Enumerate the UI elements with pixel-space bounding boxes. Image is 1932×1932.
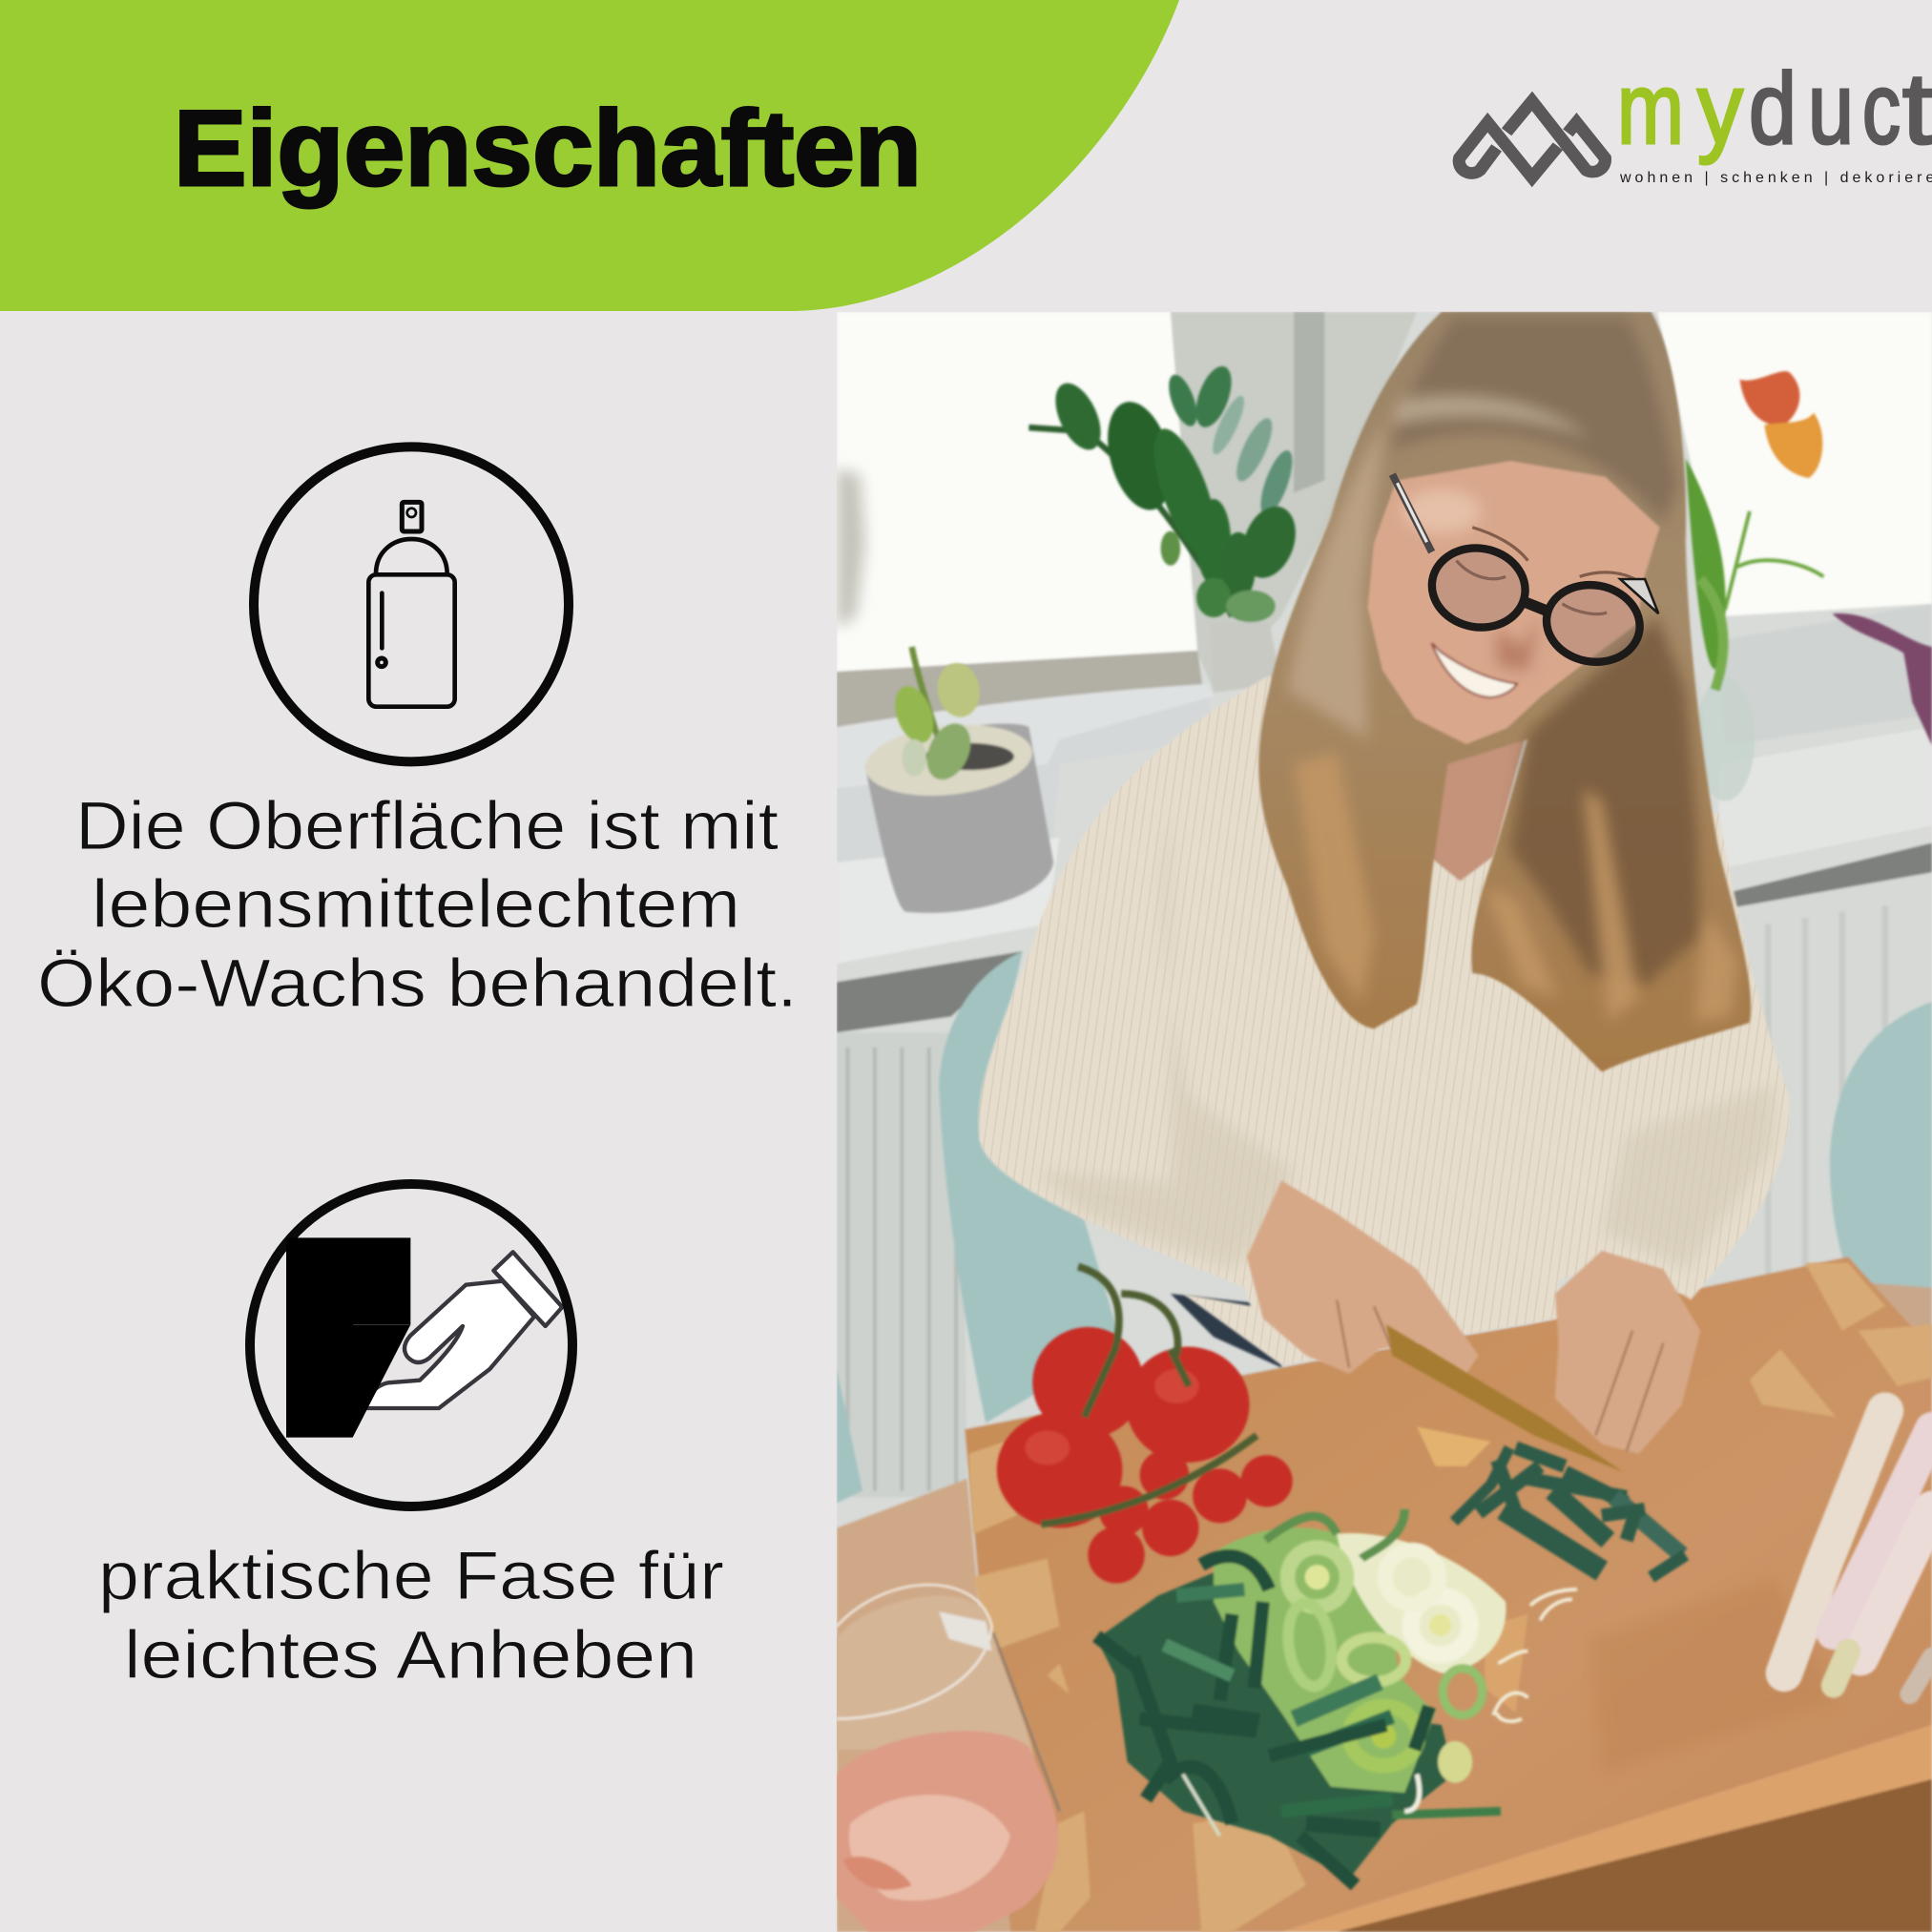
photo detail: woman's sweater — [979, 675, 1789, 1365]
photo detail: face — [1368, 461, 1660, 744]
photo detail: tomatoes — [997, 1267, 1293, 1584]
photo detail: woman's jeans — [1171, 1294, 1281, 1368]
photo detail: sweater ribs — [979, 675, 1789, 1365]
photo detail: board parquet patches — [968, 1263, 1932, 1932]
photo detail: eyes and brows — [1456, 528, 1639, 614]
photo detail: sweater shading — [1051, 1063, 1773, 1265]
panel: feature 2 — [98, 1184, 724, 1693]
photo detail: plant and pot left — [862, 647, 1053, 913]
photo detail: crown highlight — [1392, 395, 1589, 437]
logo word: u — [1808, 52, 1854, 165]
photo detail: chopped leek greens — [1454, 1447, 1686, 1577]
photo detail: lighter hair by the cheek — [1288, 419, 1386, 739]
text block: surface: Die Oberfläche ist mit — [75, 789, 779, 864]
photo detail: hair — [1258, 312, 1751, 1072]
logo word: y — [1697, 52, 1743, 165]
photo detail: sliced leek pile — [1096, 1509, 1506, 1885]
text block: surface: Öko-Wachs behandelt. — [37, 946, 798, 1022]
photo detail: forehead light — [1402, 489, 1481, 533]
photo detail: nose shadow — [1497, 616, 1540, 672]
logo mark: mountains — [1459, 101, 1605, 177]
logo word: t — [1902, 52, 1932, 165]
panel: feature 1 — [37, 447, 798, 1022]
photo detail: room and window — [837, 312, 1932, 1932]
photo detail: mouth — [1432, 643, 1517, 697]
logo word — [1617, 52, 1932, 165]
photo detail: green plant centre — [1028, 362, 1305, 693]
photo detail: hands — [1247, 1180, 1700, 1454]
photo detail: leek trimmings — [1493, 1589, 1577, 1721]
photo detail: knife — [1386, 1324, 1624, 1472]
photo detail: dark hair on the right — [1509, 616, 1700, 986]
photo detail: hair highlights — [1294, 752, 1737, 1023]
text block: surface — [37, 789, 798, 1022]
icon: spray can in circle — [254, 447, 569, 761]
photo detail: asparagus — [1784, 1411, 1932, 1694]
logo word: c — [1862, 52, 1901, 165]
icon: hand lifting board in circle — [250, 1184, 572, 1506]
text block: chamfer: leichtes Anheben — [124, 1618, 697, 1693]
photo detail: wine glass — [837, 1585, 1060, 1932]
text block: chamfer: praktische Fase für — [98, 1539, 724, 1614]
title: Eigenschaften — [174, 89, 922, 208]
logo word: d — [1749, 52, 1797, 165]
photo detail: glasses — [1392, 474, 1658, 669]
logo: myduct — [1459, 52, 1932, 186]
photo detail: dark crown — [1392, 318, 1678, 524]
green header shape — [0, 0, 1179, 311]
text block: chamfer — [98, 1539, 724, 1693]
photo detail: neck — [1433, 739, 1525, 882]
photo detail: tulips and vase — [1686, 371, 1932, 800]
photo: woman cutting vegetables — [837, 312, 1932, 1932]
logo word: m — [1617, 52, 1684, 165]
photo detail: blurred view through window — [837, 468, 865, 629]
photo detail: board shading — [1600, 1593, 1761, 1700]
text block: surface: lebensmittelechtem — [92, 867, 740, 943]
